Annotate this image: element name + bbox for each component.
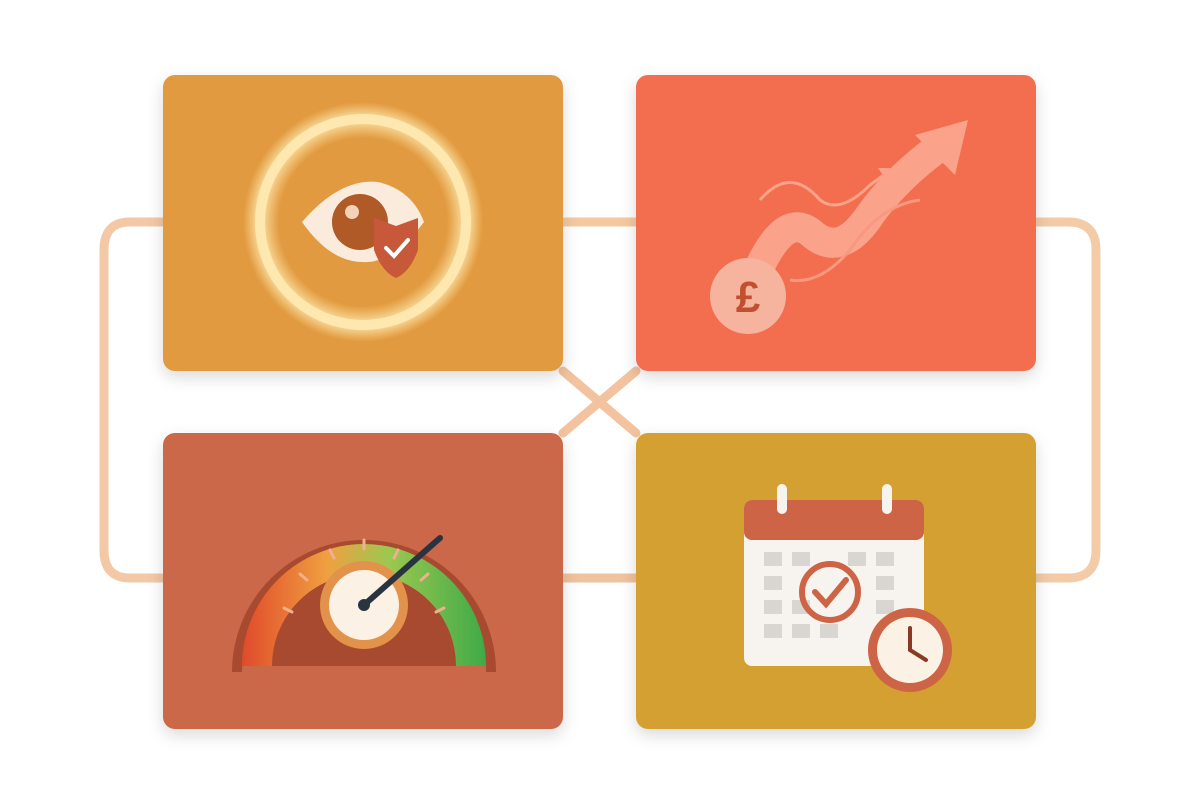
icon: upward arrow with pound coin: £ bbox=[736, 273, 761, 322]
panel: calendar schedule bbox=[636, 433, 1036, 729]
panel: eye security bbox=[163, 75, 563, 371]
panel: gauge bbox=[163, 433, 563, 729]
icon: glowing ring with eye and shield bbox=[243, 102, 483, 342]
icon: calendar with clock bbox=[744, 484, 952, 692]
icon: speedometer gauge bbox=[232, 538, 496, 672]
connector lines bbox=[104, 222, 1096, 578]
icon: upward arrow with pound coin bbox=[710, 120, 968, 334]
panel: rising pound bbox=[636, 75, 1036, 371]
